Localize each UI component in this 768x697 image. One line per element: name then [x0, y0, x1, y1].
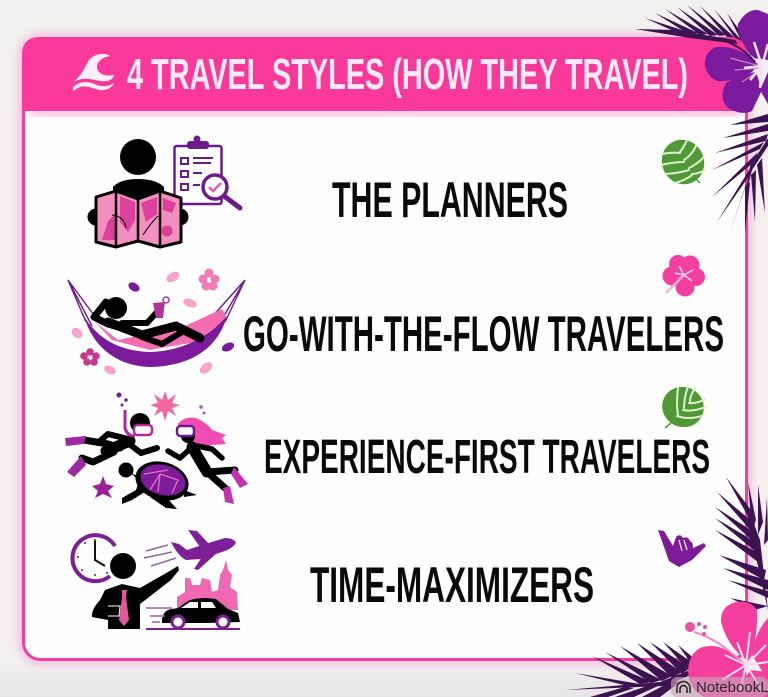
plane [171, 530, 236, 570]
star purple [92, 476, 114, 498]
decor: purple hibiscus top right [700, 10, 768, 113]
decor: pink hibiscus bottom right [685, 602, 768, 697]
small flowers [198, 268, 220, 290]
hammock fabric [94, 309, 227, 350]
car [146, 598, 240, 629]
star pink [150, 391, 180, 421]
icon: clipboard [174, 136, 240, 208]
row 4: time-maximizers [72, 530, 706, 629]
label: the planners: THE PLANNERS [332, 172, 568, 228]
person [94, 297, 200, 344]
icon: person reading map with checklist [88, 136, 240, 247]
decor: bottom palm frond [565, 642, 698, 697]
petals [70, 270, 214, 376]
row 3: experience-first [65, 380, 710, 509]
icon: scuba divers and turtle [65, 391, 248, 509]
decor: top-right palm fronds [635, 5, 768, 238]
icon: monstera leaf [654, 133, 712, 191]
city skyline [177, 560, 238, 610]
diver left [65, 392, 157, 477]
icon: person in hammock with petals [68, 268, 245, 376]
hammock ropes [68, 280, 245, 326]
label: time-maximizers: TIME-MAXIMIZERS [310, 557, 594, 613]
decor: bottom-right palm fronds [715, 477, 768, 610]
turtle [118, 456, 197, 509]
icon: shaka hand [658, 530, 706, 567]
watermark: NotebookLM [671, 677, 768, 697]
person [110, 553, 136, 579]
icon: monstera leaf [656, 380, 710, 434]
icon: wave [73, 54, 114, 91]
row 1: the planners [88, 133, 712, 247]
clock [72, 535, 115, 581]
diver right [168, 405, 248, 504]
icon: hibiscus flower [662, 255, 705, 296]
map [96, 191, 181, 247]
icon: person pointing with clock, plane, city and car [72, 530, 240, 629]
row 2: go-with-the-flow [68, 255, 724, 376]
speed lines [144, 545, 176, 566]
frond right upper [712, 114, 768, 238]
panel: header band [22, 37, 748, 116]
